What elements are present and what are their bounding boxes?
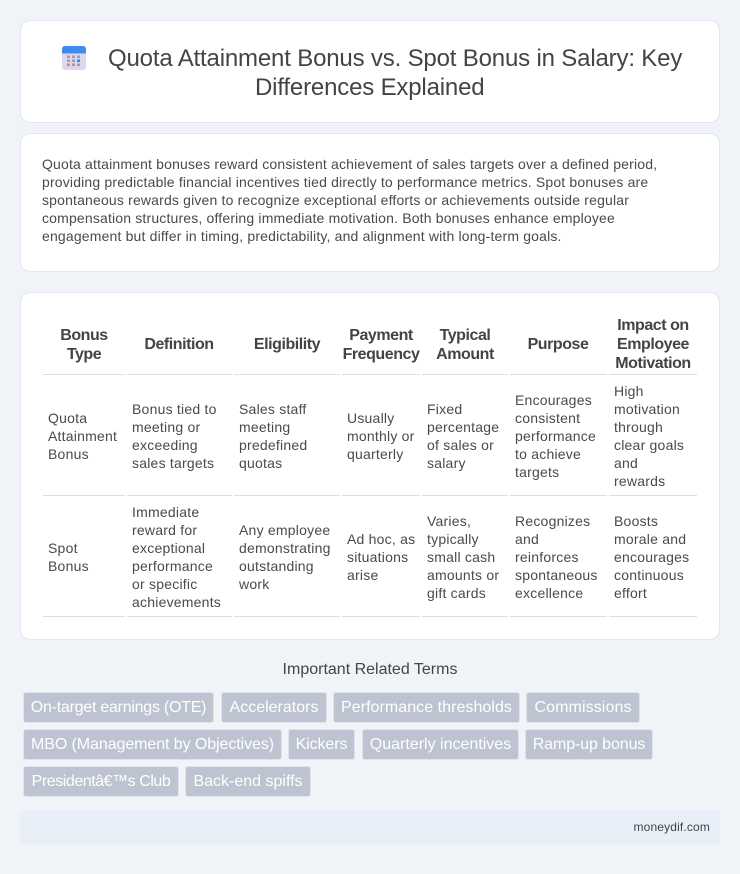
comparison table content bbox=[43, 317, 697, 617]
table headers: amounts or bbox=[427, 567, 499, 583]
table headers: Purpose bbox=[528, 336, 588, 353]
table headers: Typical bbox=[440, 327, 490, 344]
table headers: motivation bbox=[614, 401, 680, 417]
icon: calendar bbox=[62, 46, 86, 70]
panel: comparison table bbox=[20, 292, 720, 640]
table headers: Encourages bbox=[515, 392, 592, 408]
table headers: reward for bbox=[132, 522, 197, 538]
table headers: work bbox=[239, 576, 269, 592]
table headers: exceeding bbox=[132, 437, 198, 453]
table headers: Bonus bbox=[48, 558, 89, 574]
table headers: Bonus bbox=[48, 446, 89, 462]
table headers: quarterly bbox=[347, 446, 403, 462]
table headers: to achieve bbox=[515, 446, 581, 462]
panel: summary card bbox=[20, 133, 720, 272]
related terms tags: On-target earnings (OTE) bbox=[31, 699, 206, 716]
footer source: moneydif.com bbox=[634, 820, 710, 834]
table headers: performance bbox=[515, 428, 596, 444]
table headers: effort bbox=[614, 585, 647, 601]
table headers bbox=[43, 317, 697, 617]
table headers: arise bbox=[347, 567, 378, 583]
table headers: percentage bbox=[427, 419, 499, 435]
table headers: morale and bbox=[614, 531, 686, 547]
table headers: Immediate bbox=[132, 504, 199, 520]
table headers: performance bbox=[132, 558, 213, 574]
table headers: gift cards bbox=[427, 585, 486, 601]
table headers: through bbox=[614, 419, 663, 435]
table headers: spontaneous bbox=[515, 567, 598, 583]
related terms tags: Commissions bbox=[534, 699, 632, 716]
table headers: meeting bbox=[239, 419, 290, 435]
panel: title card bbox=[20, 20, 720, 123]
table headers: Fixed bbox=[427, 401, 462, 417]
table headers: Recognizes bbox=[515, 513, 590, 529]
table headers: Payment bbox=[349, 327, 413, 344]
table headers: Bonus bbox=[60, 327, 108, 344]
related terms heading: Important Related Terms bbox=[283, 661, 457, 678]
table headers: Amount bbox=[436, 346, 494, 363]
table headers: achievements bbox=[132, 594, 221, 610]
summary text: engagement but differ in timing, predictability, and alignment with long-term goals. bbox=[42, 228, 562, 244]
table headers: reinforces bbox=[515, 549, 579, 565]
table headers: Usually bbox=[347, 410, 394, 426]
table headers: or specific bbox=[132, 576, 197, 592]
table headers: Employee bbox=[617, 336, 689, 353]
summary text: Quota attainment bonuses reward consistent achievement of sales targets over a defined period, bbox=[42, 156, 657, 172]
table headers: Eligibility bbox=[254, 336, 320, 353]
table headers: and bbox=[614, 455, 638, 471]
table headers: small cash bbox=[427, 549, 495, 565]
related terms tags: Ramp-up bonus bbox=[533, 736, 645, 753]
table headers: Frequency bbox=[343, 346, 419, 363]
table headers: rewards bbox=[614, 473, 665, 489]
table headers: Motivation bbox=[615, 355, 691, 372]
table headers: salary bbox=[427, 455, 466, 471]
table headers: meeting or bbox=[132, 419, 200, 435]
table headers: sales targets bbox=[132, 455, 214, 471]
related terms tags: Accelerators bbox=[230, 699, 318, 716]
summary text: compensation structures, offering immediate motivation. Both bonuses enhance employee bbox=[42, 210, 615, 226]
table headers: Type bbox=[67, 346, 101, 363]
table headers: monthly or bbox=[347, 428, 415, 444]
related terms tags: MBO (Management by Objectives) bbox=[31, 736, 274, 753]
table headers: typically bbox=[427, 531, 479, 547]
footer bar bbox=[20, 810, 720, 844]
table headers: demonstrating bbox=[239, 540, 331, 556]
related terms tags: Performance thresholds bbox=[341, 699, 512, 716]
title: Quota Attainment Bonus vs. Spot Bonus in Salary: Key bbox=[108, 45, 682, 72]
table headers: Spot bbox=[48, 540, 78, 556]
table headers: Attainment bbox=[48, 428, 117, 444]
table headers: and bbox=[515, 531, 539, 547]
related terms tags: Kickers bbox=[296, 736, 347, 753]
table headers: Any employee bbox=[239, 522, 330, 538]
table headers: outstanding bbox=[239, 558, 314, 574]
related terms tags: Quarterly incentives bbox=[370, 736, 511, 753]
table headers: clear goals bbox=[614, 437, 684, 453]
table headers: quotas bbox=[239, 455, 282, 471]
table headers: Bonus tied to bbox=[132, 401, 217, 417]
summary text: spontaneous rewards given to recognize exceptional efforts or achievements outside regular bbox=[42, 192, 629, 208]
table headers: excellence bbox=[515, 585, 583, 601]
table headers: High bbox=[614, 383, 644, 399]
table headers: Quota bbox=[48, 410, 87, 426]
table headers: Varies, bbox=[427, 513, 471, 529]
table headers: predefined bbox=[239, 437, 307, 453]
table headers: situations bbox=[347, 549, 408, 565]
related terms tags: Back-end spiffs bbox=[193, 773, 303, 790]
title: Differences Explained bbox=[255, 74, 484, 101]
table headers: exceptional bbox=[132, 540, 205, 556]
table headers: continuous bbox=[614, 567, 684, 583]
table headers: Sales staff bbox=[239, 401, 307, 417]
table headers: Boosts bbox=[614, 513, 658, 529]
table headers: encourages bbox=[614, 549, 689, 565]
title bbox=[108, 45, 682, 101]
table headers: targets bbox=[515, 464, 559, 480]
table headers: of sales or bbox=[427, 437, 494, 453]
summary text bbox=[42, 156, 657, 244]
table headers: Impact on bbox=[617, 317, 689, 334]
table headers: Ad hoc, as bbox=[347, 531, 415, 547]
related terms tags: Presidentâ€™s Club bbox=[32, 773, 170, 790]
related terms tags bbox=[23, 692, 653, 797]
summary text: providing predictable financial incentives tied directly to performance metrics. Spot bonuses are bbox=[42, 174, 648, 190]
table headers: consistent bbox=[515, 410, 580, 426]
table headers: Definition bbox=[144, 336, 214, 353]
